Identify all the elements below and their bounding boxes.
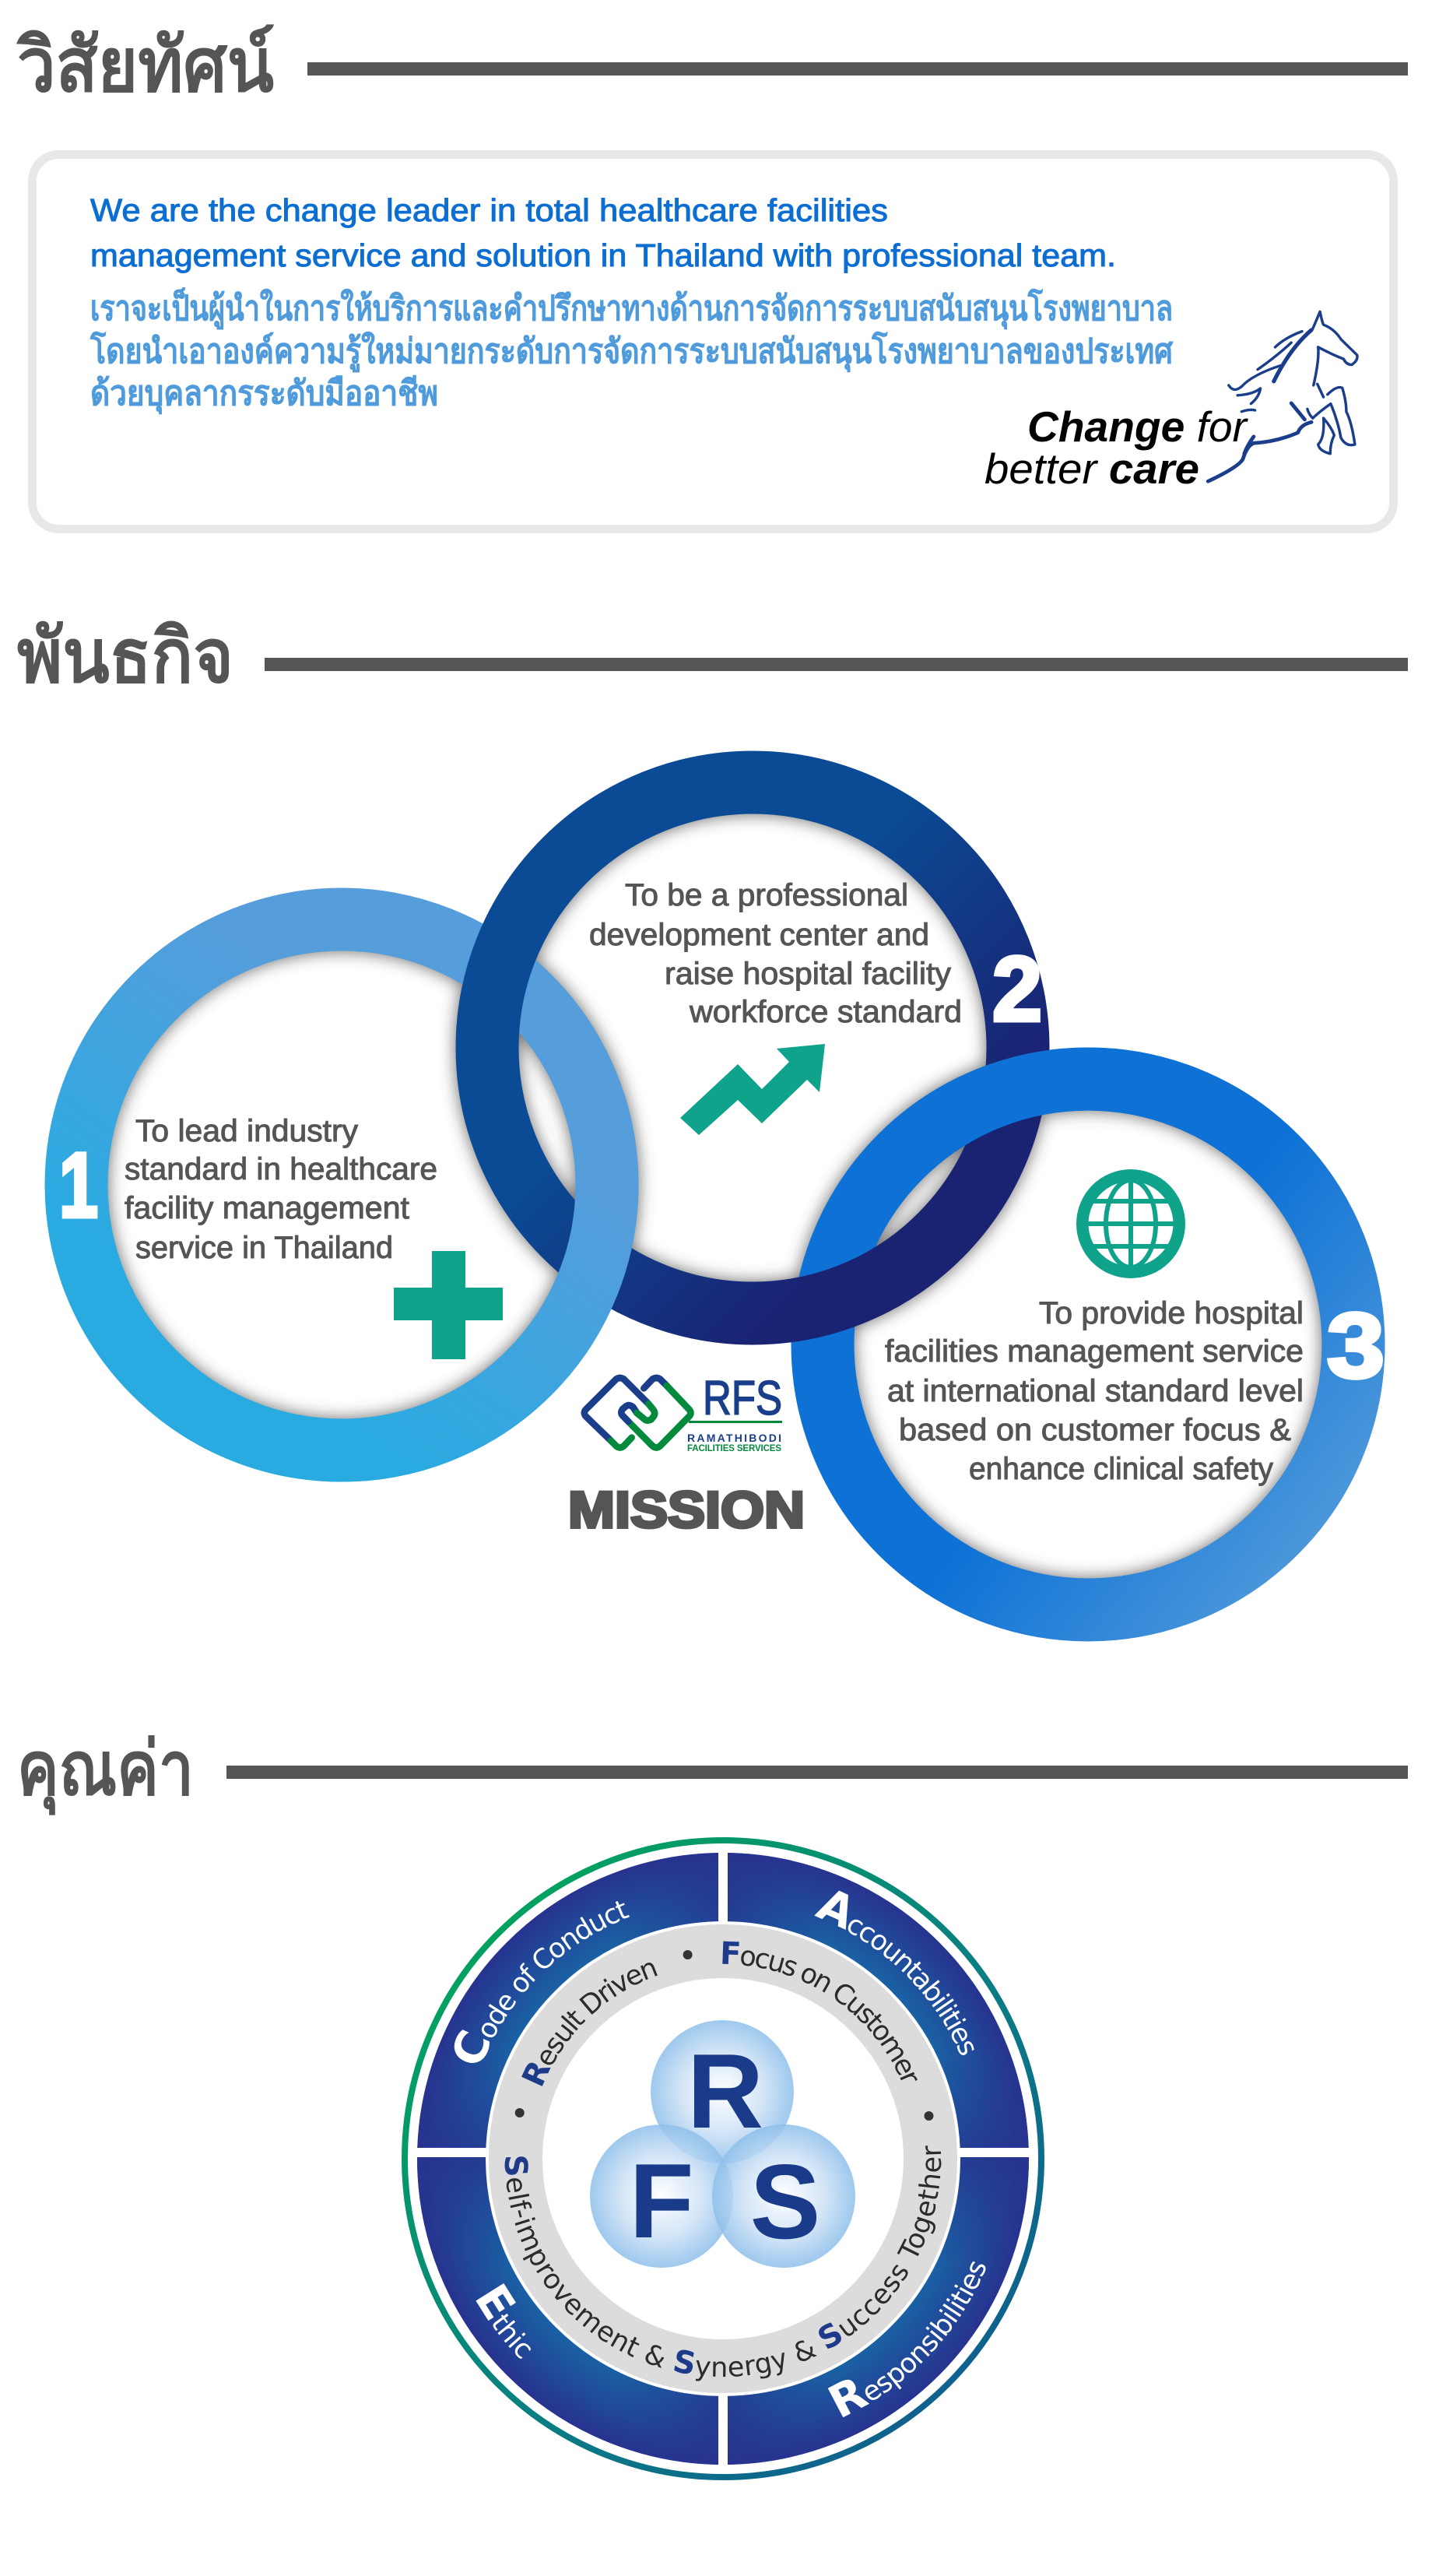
outer labels [455, 1890, 985, 2418]
blue segments [451, 1887, 995, 2430]
text: mission 3 [885, 1296, 1304, 1486]
inner labels: Focus on Customer [722, 1942, 918, 2082]
outer labels: Accountabilities [814, 1890, 974, 2055]
ring 2 [487, 782, 1018, 1313]
outer labels: Responsibilities [828, 2261, 985, 2418]
heading: vision: วิสัยทัศน์ [16, 24, 274, 107]
text: vision English [90, 192, 1116, 273]
outer ring [405, 1840, 1041, 2477]
text: mission 2: development center and [589, 918, 929, 952]
logo: RFS: RFS [703, 1372, 782, 1425]
heading: vision [16, 24, 1408, 107]
inner labels: Result Driven [521, 1963, 658, 2086]
text: vision Thai: โดยนำเอาองค์ความรู้ใหม่มายกระดับการจัดการระบบสนับสนุนโรงพยาบาลของประเทศ [89, 330, 1174, 373]
RFS bubbles: S [750, 2142, 820, 2261]
outer labels: Ethic [476, 2283, 531, 2359]
text: mission 3: To provide hospital [1039, 1296, 1304, 1330]
heading: values [17, 1727, 1408, 1815]
inner labels: Self-improvement & Synergy & Success Together [504, 2145, 942, 2381]
text: mission 2 [589, 878, 962, 1029]
heading: values: คุณค่า [17, 1727, 194, 1815]
text: mission 3: at international standard level [887, 1374, 1304, 1408]
logo: RFS [584, 1372, 782, 1453]
label: MISSION: MISSION [568, 1481, 805, 1538]
ring 1 front crossing [60, 1091, 638, 1482]
number 1: 1 [59, 1134, 98, 1237]
text: vision Thai [89, 287, 1174, 415]
heading: mission: พันธกิจ [17, 615, 233, 698]
ring 3 front crossing [823, 1079, 1353, 1610]
text: vision Thai: ด้วยบุคลากรระดับมืออาชีพ [90, 374, 438, 415]
icon: horse [1208, 311, 1357, 481]
RFS bubbles [590, 2020, 855, 2268]
icon: plus [394, 1251, 503, 1359]
text: mission 1: service in Thailand [135, 1231, 393, 1265]
text: mission 1: To lead industry [135, 1114, 358, 1148]
ring shadows inside holes [107, 814, 1321, 1579]
diagram: values wheel [402, 1837, 1044, 2480]
logo: RFS: FACILITIES SERVICES [687, 1444, 781, 1453]
panel: vision statement [33, 154, 1393, 529]
text: mission 2: raise hospital facility [665, 957, 951, 991]
text: mission 2: To be a professional [625, 878, 908, 912]
icon: rising arrow [680, 1044, 825, 1135]
separators [515, 1950, 934, 2121]
icon: globe [1076, 1169, 1185, 1278]
RFS bubbles: F [629, 2142, 694, 2260]
text: mission 1: standard in healthcare [125, 1152, 437, 1186]
ring 3 base [823, 1079, 1353, 1610]
chart: interlocking mission rings [59, 782, 1385, 1610]
text: vision English: management service and solution in Thailand with professional team. [90, 237, 1116, 273]
text: mission 3: based on customer focus & [899, 1413, 1291, 1447]
RFS bubbles: R [687, 2032, 763, 2150]
text: vision English: We are the change leader in total healthcare facilities [90, 192, 888, 228]
logo mark [584, 1378, 690, 1447]
outer labels: Code of Conduct [455, 1901, 630, 2063]
ring 1 base [76, 919, 607, 1450]
number 2: 2 [992, 938, 1042, 1041]
text: slogan: Change for [1027, 402, 1249, 451]
text: mission 1: facility management [125, 1191, 409, 1225]
heading: mission [17, 615, 1408, 698]
text: mission 1 [125, 1114, 437, 1265]
text: slogan [984, 402, 1249, 493]
gray ring [515, 1951, 931, 2367]
logo: RFS: RAMATHIBODI [687, 1432, 781, 1444]
text: vision Thai: เราจะเป็นผู้นำในการให้บริการและคำปรึกษาทางด้านการจัดการระบบสนับสนุนโรงพยาบาล [90, 287, 1173, 330]
text: mission 2: workforce standard [689, 995, 962, 1029]
text: slogan: better care [984, 445, 1199, 493]
text: mission 3: enhance clinical safety [969, 1452, 1273, 1486]
text: mission 3: facilities management service [885, 1334, 1304, 1369]
number 3: 3 [1327, 1295, 1385, 1397]
inner labels [504, 1942, 942, 2381]
